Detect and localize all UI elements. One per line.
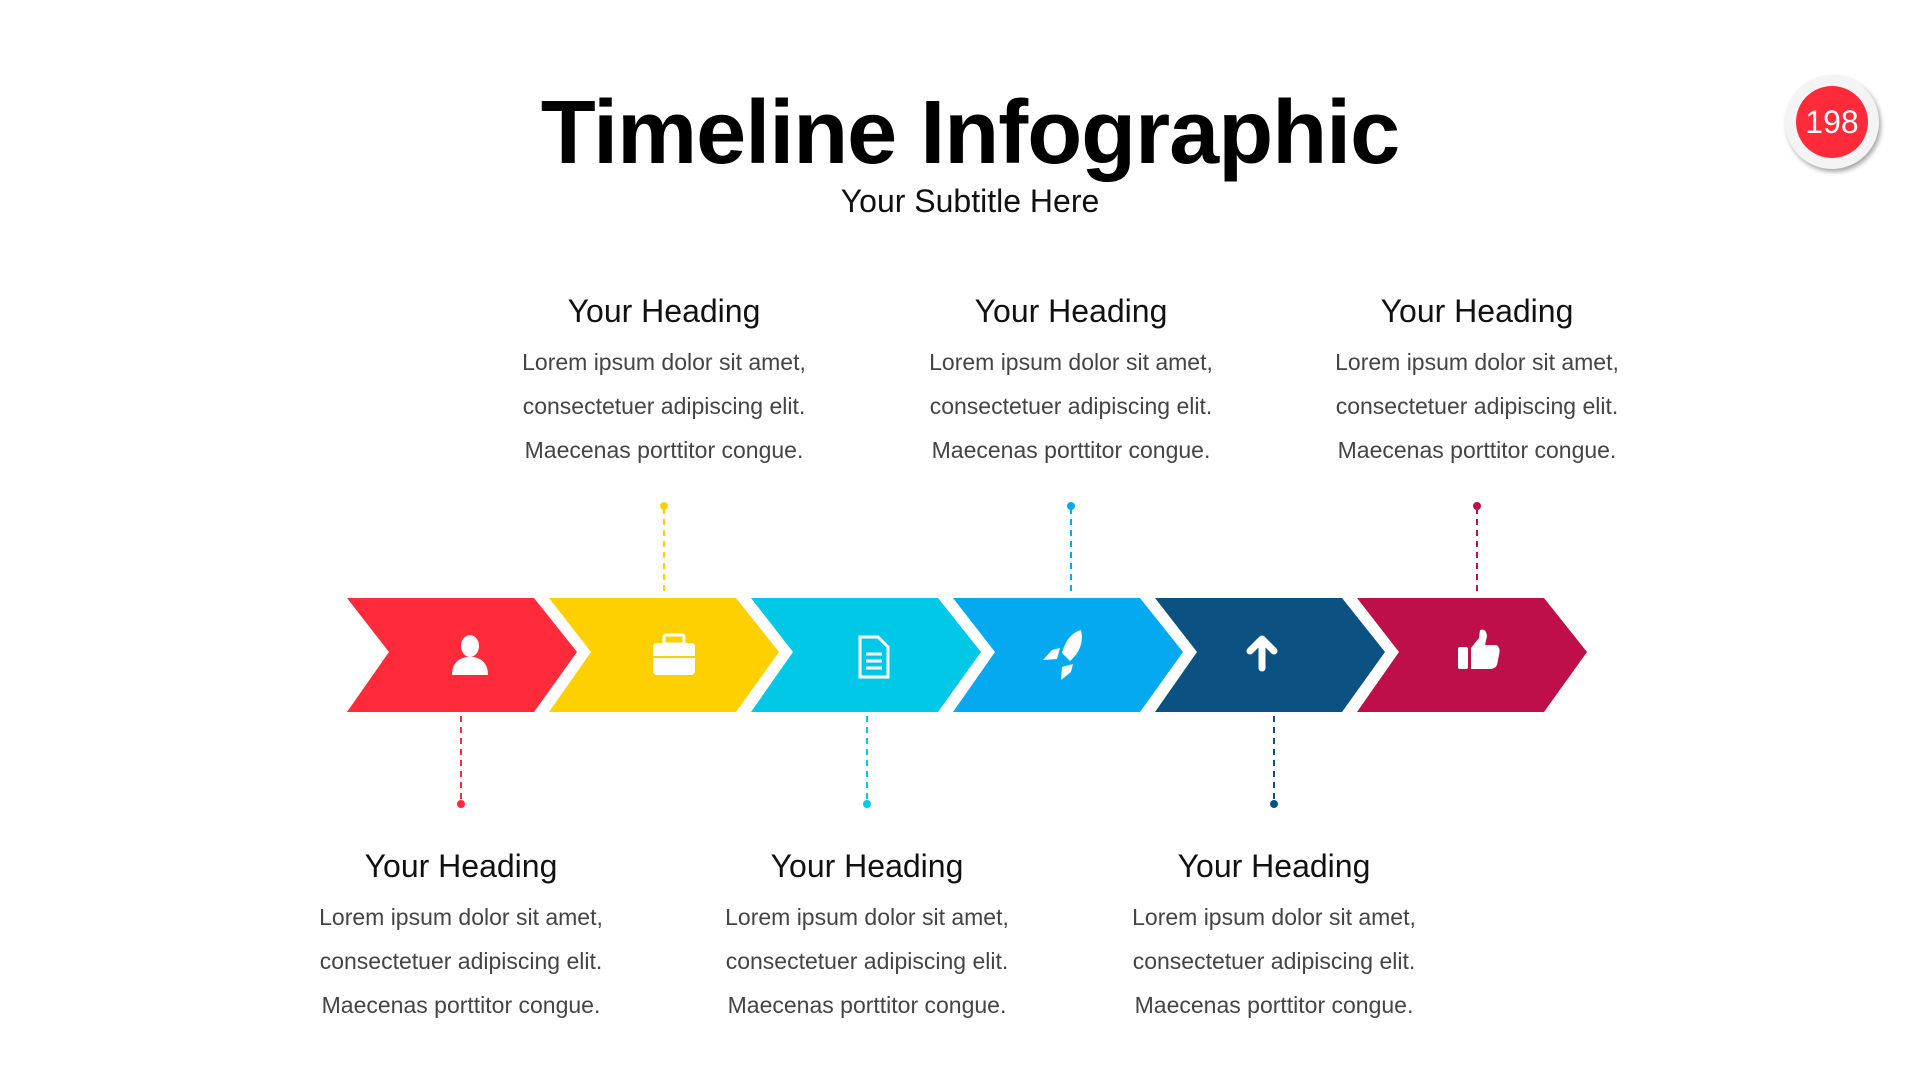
page badge: 198 <box>1805 104 1859 140</box>
text block: top 2: consectetuer adipiscing elit. <box>930 393 1212 419</box>
text block: bottom 2: Lorem ipsum dolor sit amet, <box>725 904 1009 930</box>
text block: bottom 1: Maecenas porttitor congue. <box>322 992 600 1018</box>
chevron 1 red <box>347 598 577 712</box>
icon: document <box>860 637 888 677</box>
text block: top 1: Your Heading <box>568 293 760 329</box>
chevron 3 cyan <box>751 598 981 712</box>
text block: top 2: Your Heading <box>975 293 1167 329</box>
text block: top 1: consectetuer adipiscing elit. <box>523 393 805 419</box>
chevron 4 blue <box>953 598 1183 712</box>
connector lines <box>461 508 1477 802</box>
text block: bottom 1: consectetuer adipiscing elit. <box>320 948 602 974</box>
chevron 6 magenta <box>1357 598 1587 712</box>
text block: bottom 1: Your Heading <box>365 848 557 884</box>
text block: bottom 1 <box>319 848 603 1018</box>
text block: top 3: Maecenas porttitor congue. <box>1338 437 1616 463</box>
text block: bottom 3: Your Heading <box>1178 848 1370 884</box>
text block: top 2 <box>929 293 1213 463</box>
text block: top 1 <box>522 293 806 463</box>
title: Timeline Infographic <box>541 83 1399 183</box>
text block: top 3: consectetuer adipiscing elit. <box>1336 393 1618 419</box>
text block: bottom 2: Maecenas porttitor congue. <box>728 992 1006 1018</box>
text block: bottom 2: consectetuer adipiscing elit. <box>726 948 1008 974</box>
text block: bottom 3: Maecenas porttitor congue. <box>1135 992 1413 1018</box>
text block: top 3 <box>1335 293 1619 463</box>
chevron 2 yellow <box>549 598 779 712</box>
text block: top 2: Lorem ipsum dolor sit amet, <box>929 349 1213 375</box>
icon: briefcase <box>653 635 695 675</box>
chevron 5 navy <box>1155 598 1385 712</box>
text block: bottom 1: Lorem ipsum dolor sit amet, <box>319 904 603 930</box>
text block: top 1: Lorem ipsum dolor sit amet, <box>522 349 806 375</box>
icon: thumbs up <box>1458 630 1500 669</box>
page badge <box>1785 75 1879 169</box>
text block: bottom 3 <box>1132 848 1416 1018</box>
text block: top 3: Lorem ipsum dolor sit amet, <box>1335 349 1619 375</box>
text block: top 3: Your Heading <box>1381 293 1573 329</box>
text block: bottom 3: consectetuer adipiscing elit. <box>1133 948 1415 974</box>
text block: bottom 2: Your Heading <box>771 848 963 884</box>
icon: rocket <box>1043 630 1082 680</box>
text block: top 1: Maecenas porttitor congue. <box>525 437 803 463</box>
text block: bottom 2 <box>725 848 1009 1018</box>
icon: up arrow <box>1250 639 1274 668</box>
icon: person <box>452 635 488 675</box>
subtitle: Your Subtitle Here <box>841 183 1099 219</box>
text block: bottom 3: Lorem ipsum dolor sit amet, <box>1132 904 1416 930</box>
text block: top 2: Maecenas porttitor congue. <box>932 437 1210 463</box>
